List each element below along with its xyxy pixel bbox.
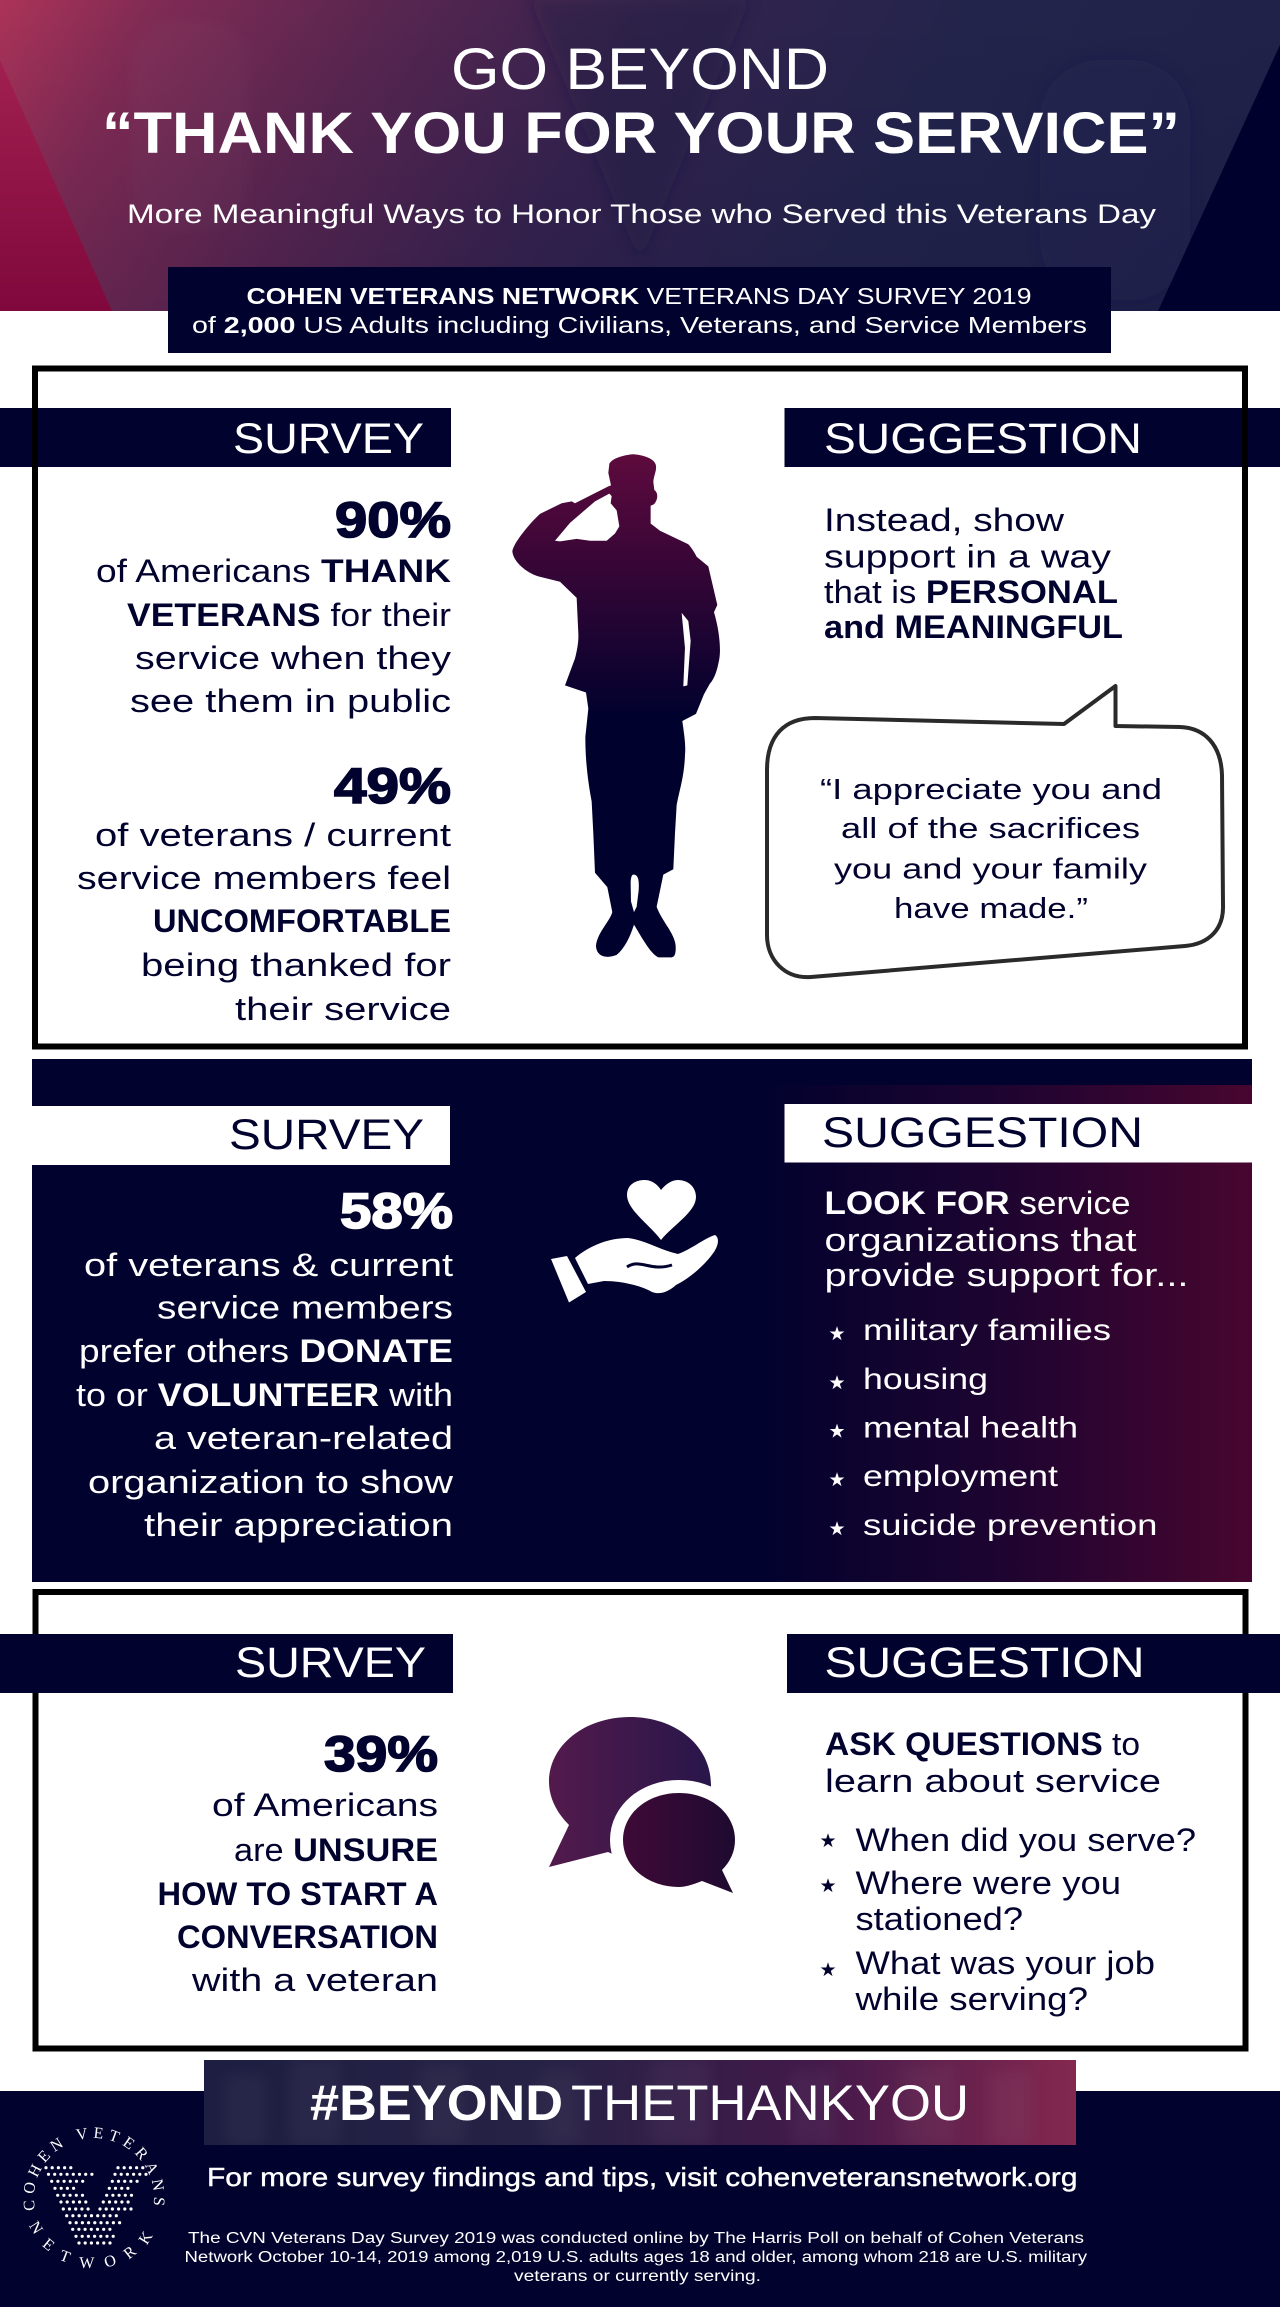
text: uncomfortable: their service [235,991,451,1027]
stat: 58%: 58% [340,1183,453,1239]
list: questions: ★ [819,1830,837,1852]
text: unsure how to start: CONVERSATION [177,1919,438,1955]
fine print: Network October 10-14, 2019 among 2,019 U.S. adults ages 18 and older, among whom 218 are U.S. military [184,2249,1087,2266]
list: questions: Where were you [856,1865,1121,1901]
text: ask questions: learn about service [825,1763,1161,1799]
survey label [0,1634,453,1693]
title: “THANK YOU FOR YOUR SERVICE” [102,101,1180,166]
suggestion label [784,408,1280,467]
text: show support: Instead, show [824,502,1065,538]
survey label [0,408,451,467]
suggestion label [787,1634,1280,1693]
list: questions: while serving? [854,1981,1088,2017]
text: unsure how to start: are UNSURE [234,1832,438,1868]
footer band [0,2091,1280,2307]
text: look for service organizations: provide support for... [824,1257,1188,1293]
text: uncomfortable: UNCOMFORTABLE [153,903,451,939]
text: uncomfortable: being thanked for [141,947,451,983]
title [102,37,1180,166]
callout: speech bubble quote: you and your family [834,854,1148,886]
survey description box: COHEN VETERANS NETWORK VETERANS DAY SURVEY 2019 [246,283,1032,309]
fine print: veterans or currently serving. [514,2268,761,2285]
suggestion label: SUGGESTION [824,1639,1144,1687]
list: support areas: ★ [828,1469,846,1491]
text: thank veterans: VETERANS for their [127,597,451,633]
subtitle: More Meaningful Ways to Honor Those who Served this Veterans Day [127,199,1157,229]
panel: section 1 thanking veterans [0,368,1280,1046]
list: questions [819,1822,1196,2017]
list: support areas: ★ [828,1420,846,1442]
stat: 49%: 49% [334,758,451,814]
text: donate or volunteer: prefer others DONATE [79,1333,453,1369]
suggestion label [784,1104,1252,1162]
logo: Cohen Veterans Network: NETWORK [28,2220,153,2268]
list: support areas: ★ [828,1372,846,1394]
list: support areas: housing [863,1363,988,1396]
text: donate or volunteer: to or VOLUNTEER with [76,1377,453,1413]
suggestion label: SUGGESTION [822,1109,1143,1157]
text: show support: and MEANINGFUL [824,609,1123,645]
text: unsure how to start: with a veteran [191,1962,438,1998]
list: questions: stationed? [856,1901,1023,1937]
text: donate or volunteer: service members [157,1290,453,1326]
survey label: SURVEY [233,415,424,463]
list: support areas: suicide prevention [863,1509,1158,1542]
hashtag banner: #BEYOND [310,2075,563,2131]
survey label: SURVEY [229,1111,424,1159]
hashtag banner [204,2060,1076,2145]
text: donate or volunteer: their appreciation [144,1507,453,1543]
frame [36,1592,1246,2048]
survey label [32,1106,450,1165]
fine print [184,2230,1087,2285]
text: look for service organizations [824,1185,1188,1293]
list: support areas: mental health [863,1412,1078,1444]
icon: speech bubbles [549,1717,735,1893]
list: questions: ★ [819,1875,837,1897]
text: ask questions [825,1726,1161,1799]
callout: speech bubble quote: have made.” [894,893,1088,925]
list: support areas [828,1314,1158,1542]
text: uncomfortable: service members feel [77,860,451,896]
header banner background [0,0,1280,311]
list: support areas: ★ [828,1323,846,1345]
text: donate or volunteer [76,1247,454,1543]
survey description box: of 2,000 US Adults including Civilians, Veterans, and Service Members [192,312,1087,338]
title: GO BEYOND [451,37,829,102]
logo: Cohen Veterans Network [24,2127,164,2268]
icon: hand holding heart [551,1180,718,1302]
callout: speech bubble quote [767,686,1223,977]
fine print: The CVN Veterans Day Survey 2019 was conducted online by The Harris Poll on behalf of Cohen Veterans [188,2230,1084,2247]
text: thank veterans [96,553,451,719]
text: unsure how to start [158,1787,438,1998]
callout: speech bubble quote: “I appreciate you and [820,774,1162,806]
list: questions: When did you serve? [856,1822,1196,1858]
text: look for service organizations: LOOK FOR service [824,1185,1130,1221]
text: thank veterans: of Americans THANK [96,553,451,589]
icon: saluting soldier [512,454,720,957]
text: show support: support in a way [824,538,1111,574]
stat: 90%: 90% [335,492,451,548]
text: thank veterans: see them in public [130,683,451,719]
text: show support [824,502,1123,645]
text: donate or volunteer: a veteran-related [154,1420,453,1456]
text: unsure how to start: of Americans [212,1787,438,1823]
call to action: For more survey findings and tips, visit cohenveteransnetwork.org [207,2162,1078,2192]
list: questions: What was your job [856,1945,1155,1981]
suggestion label: SUGGESTION [824,415,1142,463]
list: support areas: ★ [828,1518,846,1540]
survey description box [168,267,1111,353]
frame [35,368,1245,1046]
logo: Cohen Veterans Network: COHEN VETERANS [24,2127,164,2210]
panel: section 3 start a conversation [0,1592,1280,2048]
stat: 39%: 39% [324,1726,438,1782]
text: uncomfortable: of veterans / current [95,817,451,853]
panel: section 2 donate or volunteer [32,1059,1252,1582]
text: look for service organizations: organizations that [824,1222,1137,1258]
list: support areas: military families [863,1314,1111,1347]
text: donate or volunteer: of veterans & current [84,1247,453,1283]
text: donate or volunteer: organization to show [88,1464,454,1500]
text: uncomfortable [77,817,451,1027]
survey label: SURVEY [235,1639,426,1687]
hashtag banner: THETHANKYOU [571,2075,969,2131]
text: thank veterans: service when they [135,640,451,676]
list: questions: ★ [819,1959,837,1981]
text: ask questions: ASK QUESTIONS to [825,1726,1140,1762]
list: support areas: employment [863,1460,1059,1493]
text: show support: that is PERSONAL [824,574,1118,610]
text: unsure how to start: HOW TO START A [158,1876,438,1912]
callout: speech bubble quote: all of the sacrifices [841,813,1140,845]
